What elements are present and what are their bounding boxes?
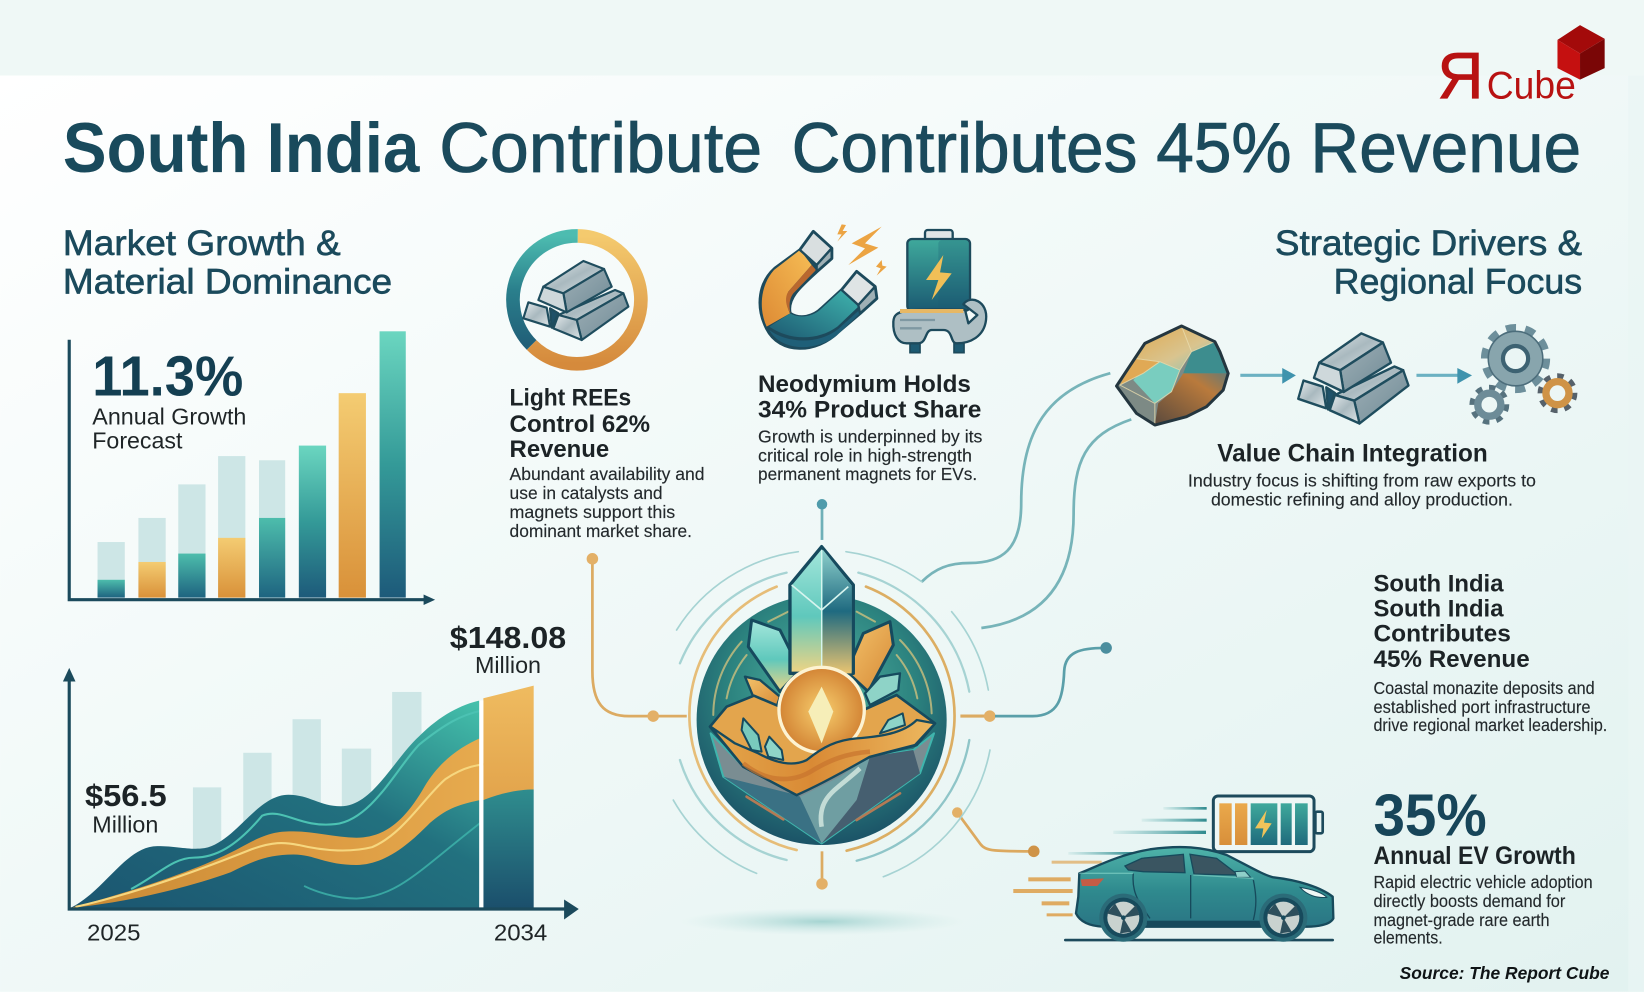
text: 35% annual EV growth: Rapid electric vehicle adoption bbox=[1373, 872, 1593, 892]
emblem shadow bbox=[680, 908, 964, 935]
area chart labels: $148.08 bbox=[450, 621, 566, 655]
text: neodymium holds 34% product share: Neodymium Holds bbox=[758, 371, 971, 398]
text: 35% annual EV growth bbox=[1373, 782, 1593, 948]
icon: raw ore rock bbox=[1117, 326, 1228, 425]
text: light REEs control 62% revenue: dominant market share. bbox=[510, 521, 692, 541]
connectors: value chain to emblem bbox=[922, 373, 1131, 628]
text: light REEs control 62% revenue: Revenue bbox=[510, 436, 609, 463]
text: light REEs control 62% revenue bbox=[510, 385, 705, 541]
text: south india contributes 45% revenue: established port infrastructure bbox=[1373, 697, 1591, 717]
area chart labels bbox=[85, 621, 566, 945]
heading: strategic drivers and regional focus bbox=[1275, 223, 1582, 302]
text: 35% annual EV growth: directly boosts demand for bbox=[1373, 891, 1566, 911]
text: 35% annual EV growth: Annual EV Growth bbox=[1373, 842, 1576, 870]
arrow: ore to ingot bbox=[1240, 368, 1296, 384]
heading: strategic drivers and regional focus: Strategic Drivers & bbox=[1275, 223, 1582, 263]
text: light REEs control 62% revenue: Light REEs bbox=[510, 385, 631, 412]
area chart labels: Million bbox=[475, 652, 541, 678]
heading: market growth and material dominance: Market Growth & bbox=[63, 223, 341, 263]
text: light REEs control 62% revenue: magnets support this bbox=[510, 502, 676, 522]
heading: market growth and material dominance bbox=[63, 223, 392, 302]
icon: donut with silver ingots bbox=[513, 236, 641, 364]
title: Contribute bbox=[439, 108, 762, 187]
logo: RCube: Я bbox=[1437, 39, 1484, 113]
text: south india contributes 45% revenue: Contributes bbox=[1373, 621, 1511, 648]
source note: Source: The Report Cube bbox=[1400, 963, 1609, 983]
area chart labels: Million bbox=[92, 811, 158, 837]
text: light REEs control 62% revenue: Abundant availability and bbox=[510, 464, 705, 484]
text: neodymium holds 34% product share: permanent magnets for EVs. bbox=[758, 464, 977, 484]
stat: 11.3% annual growth forecast: 11.3% bbox=[92, 344, 243, 407]
text: south india contributes 45% revenue: 45% Revenue bbox=[1373, 646, 1530, 673]
icon: EV battery bbox=[1113, 796, 1323, 852]
area chart: market size 2025 to 2034 bbox=[63, 668, 579, 919]
stat: 11.3% annual growth forecast: Forecast bbox=[92, 428, 183, 454]
icon: gears bbox=[1473, 328, 1574, 421]
text: value chain integration: Value Chain Integration bbox=[1217, 439, 1488, 467]
text: light REEs control 62% revenue: Control 62% bbox=[510, 411, 650, 438]
logo: RCube bbox=[1437, 25, 1605, 113]
title: Contributes 45% Revenue bbox=[792, 108, 1581, 187]
logo: RCube: Cube bbox=[1487, 65, 1576, 108]
connector: light REEs to emblem bbox=[587, 553, 687, 722]
connector: neodymium to emblem bbox=[817, 499, 827, 540]
text: value chain integration: Industry focus is shifting from raw exports to bbox=[1188, 470, 1536, 490]
text: neodymium holds 34% product share: critical role in high-strength bbox=[758, 445, 972, 465]
icon: electric car bbox=[1013, 847, 1334, 942]
text: 35% annual EV growth: 35% bbox=[1373, 782, 1487, 849]
connector: EV growth to emblem bbox=[952, 807, 1040, 857]
bar chart: annual growth forecast bbox=[69, 331, 435, 605]
emblem: rare earth crystals bbox=[673, 547, 990, 877]
area chart labels: 2034 bbox=[494, 919, 547, 945]
icon: refined ingots bbox=[1298, 333, 1408, 423]
text: south india contributes 45% revenue: South India bbox=[1373, 570, 1504, 597]
text: south india contributes 45% revenue: Coastal monazite deposits and bbox=[1373, 678, 1595, 698]
text: south india contributes 45% revenue: South India bbox=[1373, 595, 1504, 622]
text: light REEs control 62% revenue: use in catalysts and bbox=[510, 483, 663, 503]
text: value chain integration bbox=[1188, 439, 1536, 509]
stat: 11.3% annual growth forecast bbox=[92, 344, 246, 454]
text: value chain integration: domestic refining and alloy production. bbox=[1211, 489, 1513, 509]
text: 35% annual EV growth: elements. bbox=[1373, 928, 1443, 948]
text: neodymium holds 34% product share: 34% Product Share bbox=[758, 396, 981, 423]
text: 35% annual EV growth: magnet-grade rare earth bbox=[1373, 910, 1550, 930]
area chart labels: $56.5 bbox=[85, 779, 167, 813]
icon: magnet and battery bbox=[760, 224, 986, 353]
text: neodymium holds 34% product share bbox=[758, 371, 983, 484]
connector: south india to emblem bbox=[960, 642, 1112, 722]
title bbox=[63, 108, 1581, 187]
text: neodymium holds 34% product share: Growth is underpinned by its bbox=[758, 426, 983, 446]
heading: market growth and material dominance: Material Dominance bbox=[63, 262, 392, 302]
text: south india contributes 45% revenue: drive regional market leadership. bbox=[1373, 715, 1607, 735]
heading: strategic drivers and regional focus: Regional Focus bbox=[1334, 262, 1582, 302]
text: south india contributes 45% revenue bbox=[1373, 570, 1607, 735]
title: South India bbox=[63, 108, 420, 187]
stat: 11.3% annual growth forecast: Annual Growth bbox=[92, 404, 246, 430]
area chart labels: 2025 bbox=[87, 919, 141, 945]
connector: emblem base dot bbox=[816, 851, 828, 890]
arrow: ingot to gears bbox=[1416, 368, 1472, 384]
